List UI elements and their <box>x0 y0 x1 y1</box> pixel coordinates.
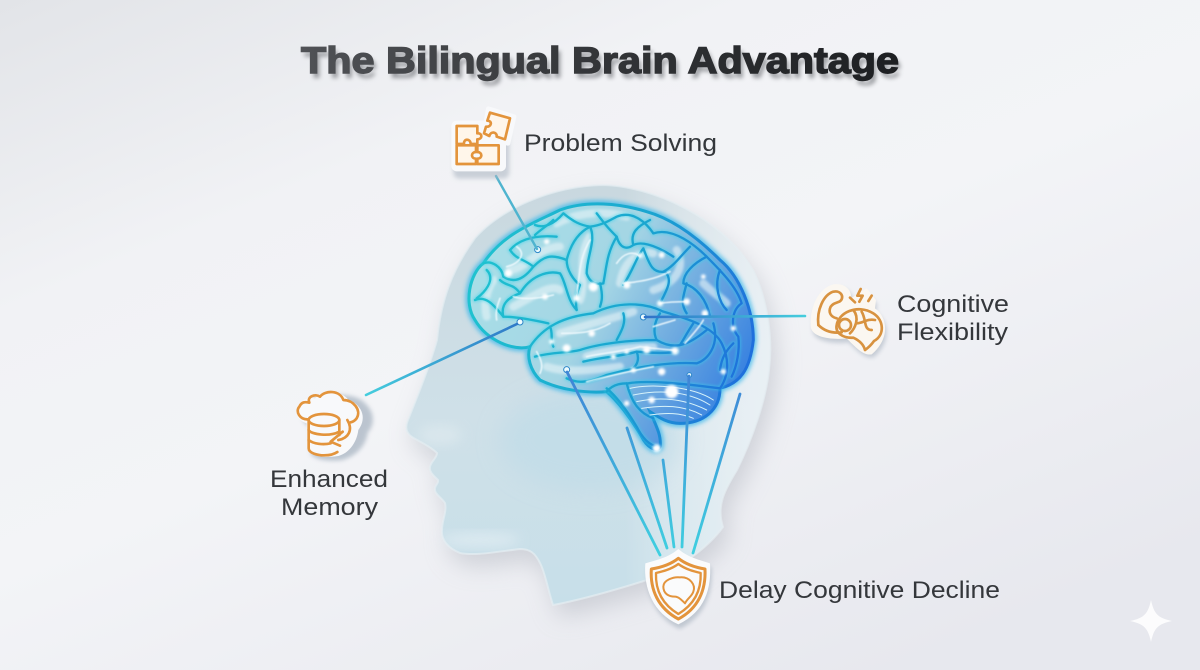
label: problem solving: Problem Solving <box>524 130 717 157</box>
label: cognitive flexibility: Cognitive <box>897 291 1009 318</box>
glowing neural nodes <box>505 239 736 452</box>
line to enhanced memory <box>366 324 517 395</box>
fold glow <box>475 213 742 447</box>
icon: shield with brain, delay cognitive decline <box>645 549 712 629</box>
line to cognitive flexibility <box>645 316 805 317</box>
silvery gyri highlights <box>485 213 727 371</box>
icon: flexed arm and brain, cognitive flexibility <box>811 284 886 358</box>
title: The Bilingual Brain Advantage <box>301 40 899 81</box>
line to problem solving <box>496 176 537 249</box>
label: delay cognitive decline: Delay Cognitive Decline <box>719 577 1000 604</box>
icon: puzzle, problem solving <box>451 109 514 179</box>
cerebral folds <box>475 213 742 447</box>
label: enhanced memory: Memory <box>281 494 378 521</box>
label: enhanced memory <box>270 466 388 521</box>
fold highlights <box>496 240 703 382</box>
head silhouette <box>406 185 776 617</box>
icon: cloud and database, enhanced memory <box>297 392 373 461</box>
cerebellum ridges <box>630 386 713 418</box>
brain <box>469 204 753 452</box>
connector lines <box>366 176 805 555</box>
label: cognitive flexibility <box>897 291 1009 346</box>
label: cognitive flexibility: Flexibility <box>897 319 1008 346</box>
brain glow <box>469 204 753 449</box>
label: enhanced memory: Enhanced <box>270 466 388 493</box>
title: The Bilingual Brain Advantage <box>304 45 902 86</box>
connector anchor nodes <box>517 247 692 377</box>
cerebrum and cerebellum body <box>469 204 753 449</box>
lines to delay cognitive decline <box>567 372 740 555</box>
icon: sparkle watermark <box>1130 600 1172 642</box>
